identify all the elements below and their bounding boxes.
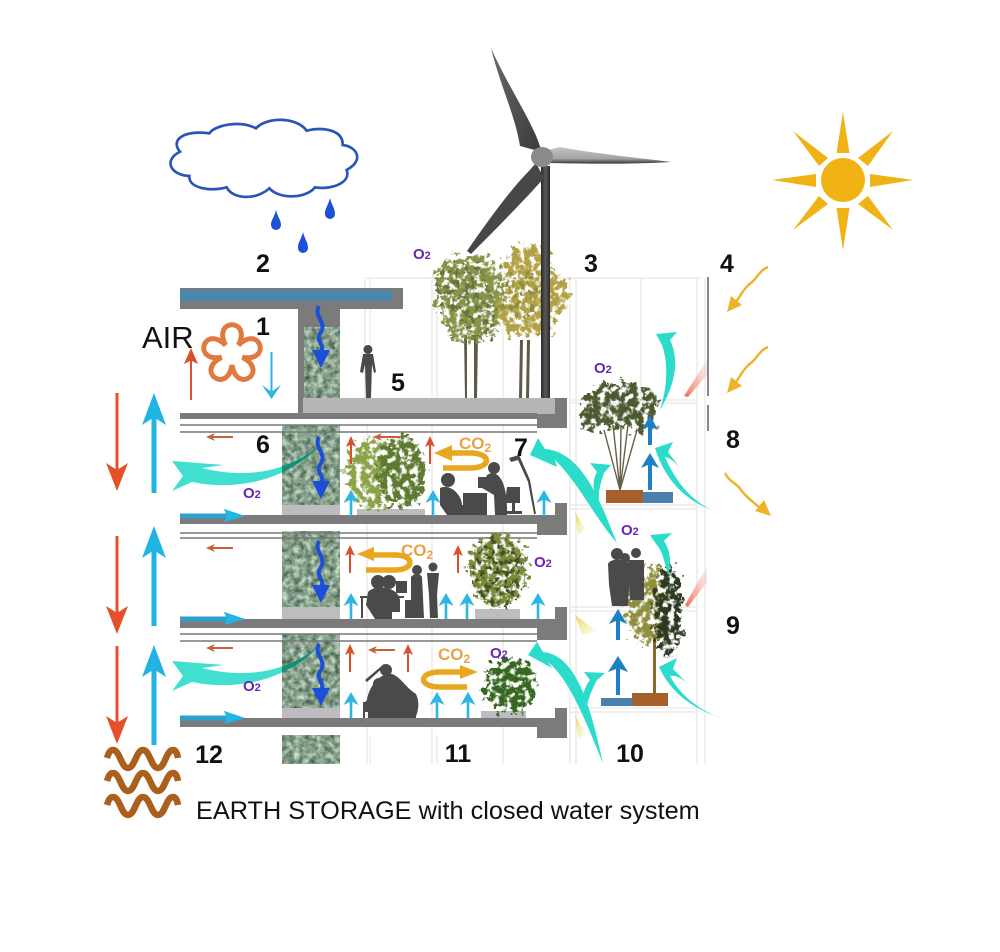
- plant: ficus level 2: [469, 534, 527, 606]
- number labels: 9: [726, 612, 740, 640]
- silhouette: office group level 2: [360, 562, 439, 619]
- teal airflow swooshes: [172, 332, 727, 763]
- oxygen labels: O2: [243, 678, 261, 695]
- wavy sun rays: [725, 267, 771, 516]
- number labels: [195, 250, 740, 769]
- sun: [772, 112, 913, 250]
- building grid lines: [365, 278, 705, 764]
- carbon dioxide labels: CO: [401, 541, 426, 560]
- carbon dioxide labels: [401, 434, 492, 666]
- oxygen labels: O2: [413, 246, 431, 263]
- orange CO2 cycle arrows: [357, 445, 486, 687]
- AIR label: AIR: [142, 320, 194, 355]
- silhouette: office group level 3: [363, 664, 418, 718]
- number labels: 12: [195, 741, 223, 769]
- number labels: 4: [720, 250, 734, 278]
- facade dark line: [707, 277, 709, 431]
- number labels: 7: [514, 434, 528, 462]
- small cyan up arrows: [344, 490, 552, 718]
- cloud: [171, 120, 357, 197]
- weeping tree: [625, 564, 682, 694]
- planters: [601, 490, 673, 706]
- rain drops: [271, 198, 335, 253]
- wind turbine: [467, 48, 671, 399]
- blue water up arrows on balcony: [608, 415, 659, 695]
- silhouette: office group level 1: [440, 455, 536, 515]
- carbon dioxide labels: 2: [464, 652, 470, 666]
- oxygen labels: O2: [621, 522, 639, 539]
- silhouette: standing person on roof: [360, 345, 376, 398]
- number labels: 2: [256, 250, 270, 278]
- fan: air handling: [204, 325, 260, 379]
- carbon dioxide labels: CO: [438, 645, 464, 664]
- earth storage waves: [107, 750, 178, 815]
- rooftop trees: [434, 244, 569, 398]
- plant: bamboo level 3: [484, 658, 536, 712]
- small red arrows: [206, 433, 463, 672]
- carbon dioxide labels: 2: [484, 441, 492, 455]
- floor slabs: [180, 398, 567, 738]
- number labels: 11: [445, 740, 471, 768]
- oxygen labels: O2: [594, 360, 612, 377]
- green wall columns: [282, 327, 340, 764]
- number labels: 1: [256, 313, 270, 341]
- plant: bamboo planter level 1: [346, 436, 426, 510]
- number labels: 5: [391, 369, 405, 397]
- air arrows by fan: [184, 348, 281, 400]
- oxygen labels: O2: [490, 645, 508, 662]
- oxygen labels: O2: [534, 554, 552, 571]
- carbon dioxide labels: 2: [426, 548, 434, 562]
- solar heat glow wedges: [575, 360, 707, 738]
- oxygen labels: [243, 246, 639, 695]
- number labels: 6: [256, 431, 270, 459]
- balcony tree upper: [580, 383, 658, 490]
- big supply and exhaust arrows: [106, 393, 166, 745]
- wavy water arrows: [312, 306, 330, 706]
- earth storage caption: EARTH STORAGE with closed water system: [196, 797, 700, 825]
- roof slab with water: [180, 288, 403, 418]
- oxygen labels: O2: [243, 485, 261, 502]
- carbon dioxide labels: CO: [459, 434, 484, 453]
- number labels: 10: [616, 740, 644, 768]
- number labels: 3: [584, 250, 598, 278]
- under-slab air arrows: [180, 509, 245, 724]
- number labels: 8: [726, 426, 740, 454]
- silhouette: people on balcony: [608, 548, 644, 606]
